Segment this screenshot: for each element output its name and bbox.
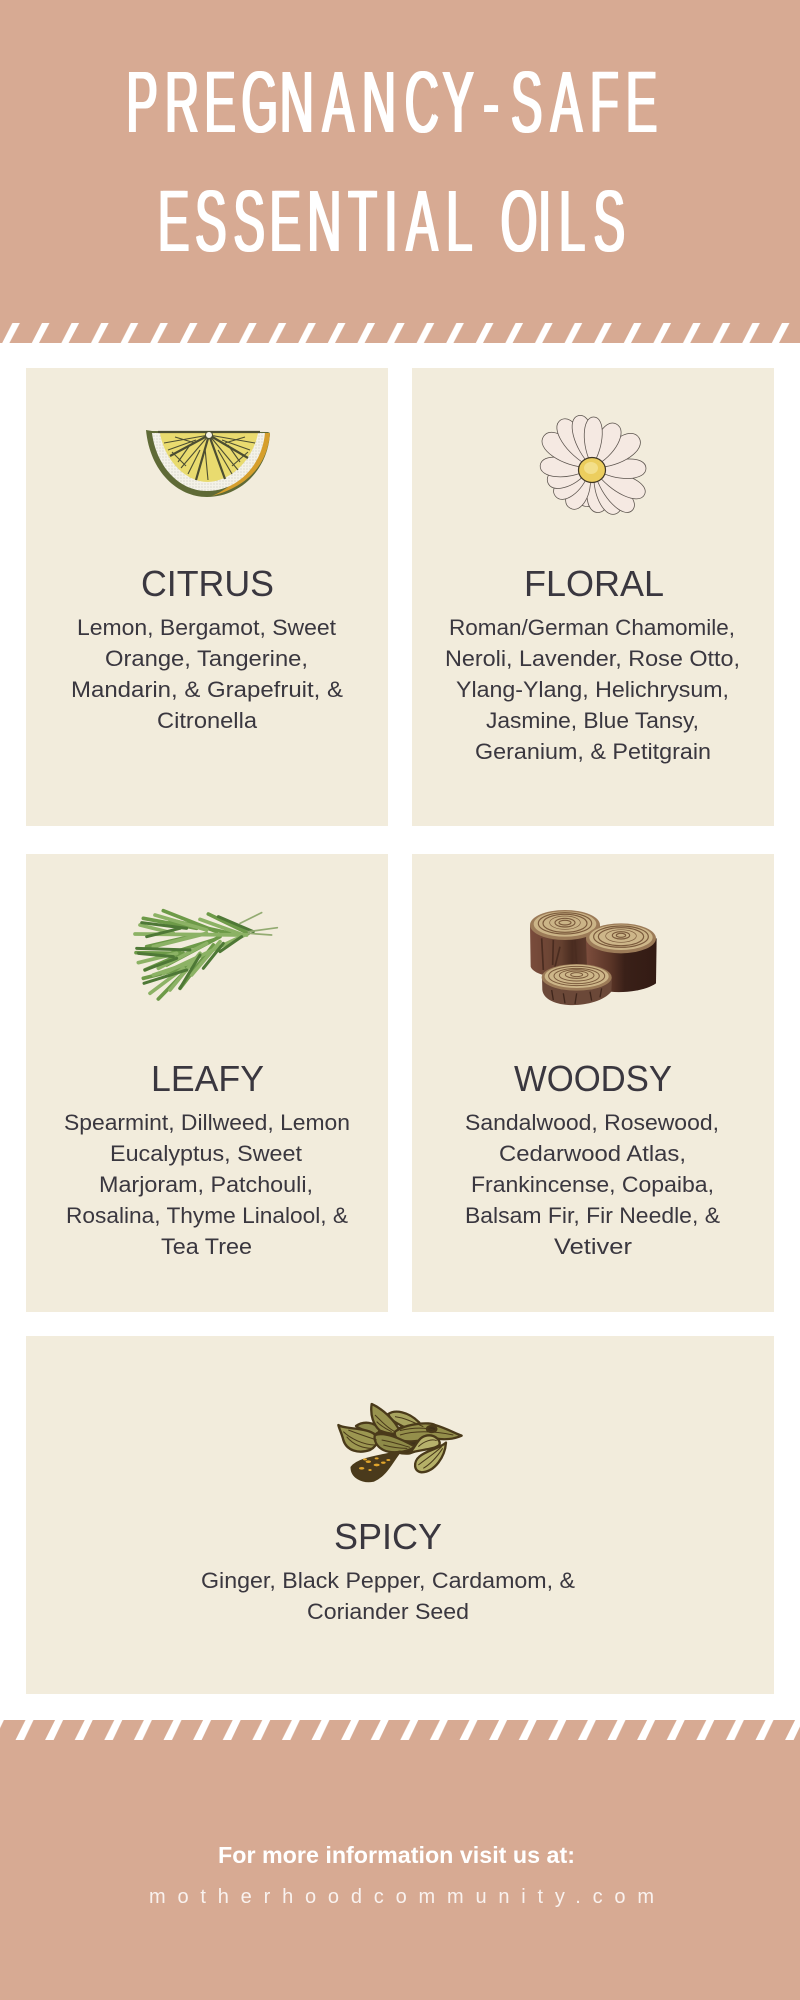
panel: spicy [26, 1336, 774, 1694]
text: woodsy oils [465, 1110, 720, 1259]
text: citrus oils: Orange, Tangerine, [105, 646, 308, 671]
text: citrus oils: Mandarin, & Grapefruit, & [71, 677, 343, 702]
title: ESSENTIAL OILS [157, 173, 624, 270]
text: leafy oils: Eucalyptus, Sweet [110, 1141, 303, 1166]
icon: daisy [537, 413, 649, 518]
icon: lemon slice [146, 430, 270, 497]
footer call to action: For more information visit us at: [218, 1842, 575, 1868]
heading: leafy: LEAFY [151, 1058, 264, 1099]
text: woodsy oils: Cedarwood Atlas, [499, 1141, 686, 1166]
text: floral oils: Roman/German Chamomile, [449, 615, 735, 640]
panel: woodsy [412, 854, 774, 1312]
header banner [0, 0, 800, 343]
text: leafy oils: Marjoram, Patchouli, [99, 1172, 313, 1197]
text: spicy oils [201, 1568, 575, 1624]
text: woodsy oils: Frankincense, Copaiba, [471, 1172, 714, 1197]
heading: woodsy: WOODSY [514, 1058, 672, 1099]
icon: cardamom pods [338, 1404, 462, 1481]
panel: leafy [26, 854, 388, 1312]
heading: citrus: CITRUS [141, 563, 274, 604]
text: leafy oils: Spearmint, Dillweed, Lemon [64, 1110, 350, 1135]
heading: floral: FLORAL [524, 563, 664, 604]
text: woodsy oils: Balsam Fir, Fir Needle, & [465, 1203, 720, 1228]
text: floral oils: Neroli, Lavender, Rose Otto, [445, 646, 740, 671]
text: citrus oils: Lemon, Bergamot, Sweet [77, 615, 337, 640]
icon: wood logs [530, 910, 657, 1005]
title: PREGNANCY-SAFE [125, 54, 656, 151]
text: floral oils [445, 615, 740, 764]
text: leafy oils: Rosalina, Thyme Linalool, & [66, 1203, 348, 1228]
text: floral oils: Geranium, & Petitgrain [475, 739, 711, 764]
title [125, 54, 656, 270]
text: spicy oils: Coriander Seed [307, 1599, 469, 1624]
panel: citrus [26, 368, 388, 826]
text: citrus oils [71, 615, 343, 733]
text: citrus oils: Citronella [157, 708, 258, 733]
text: woodsy oils: Vetiver [554, 1234, 633, 1259]
heading: spicy: SPICY [334, 1516, 442, 1557]
text: floral oils: Jasmine, Blue Tansy, [486, 708, 699, 733]
text: spicy oils: Ginger, Black Pepper, Cardamom, & [201, 1568, 575, 1593]
text: leafy oils: Tea Tree [161, 1234, 252, 1259]
footer website: motherhoodcommunity.com [149, 1886, 654, 1908]
text: leafy oils [64, 1110, 350, 1259]
panel: floral [412, 368, 774, 826]
text: woodsy oils: Sandalwood, Rosewood, [465, 1110, 719, 1135]
footer banner [0, 1720, 800, 2000]
icon: rosemary sprig [135, 911, 277, 999]
text: floral oils: Ylang-Ylang, Helichrysum, [456, 677, 729, 702]
